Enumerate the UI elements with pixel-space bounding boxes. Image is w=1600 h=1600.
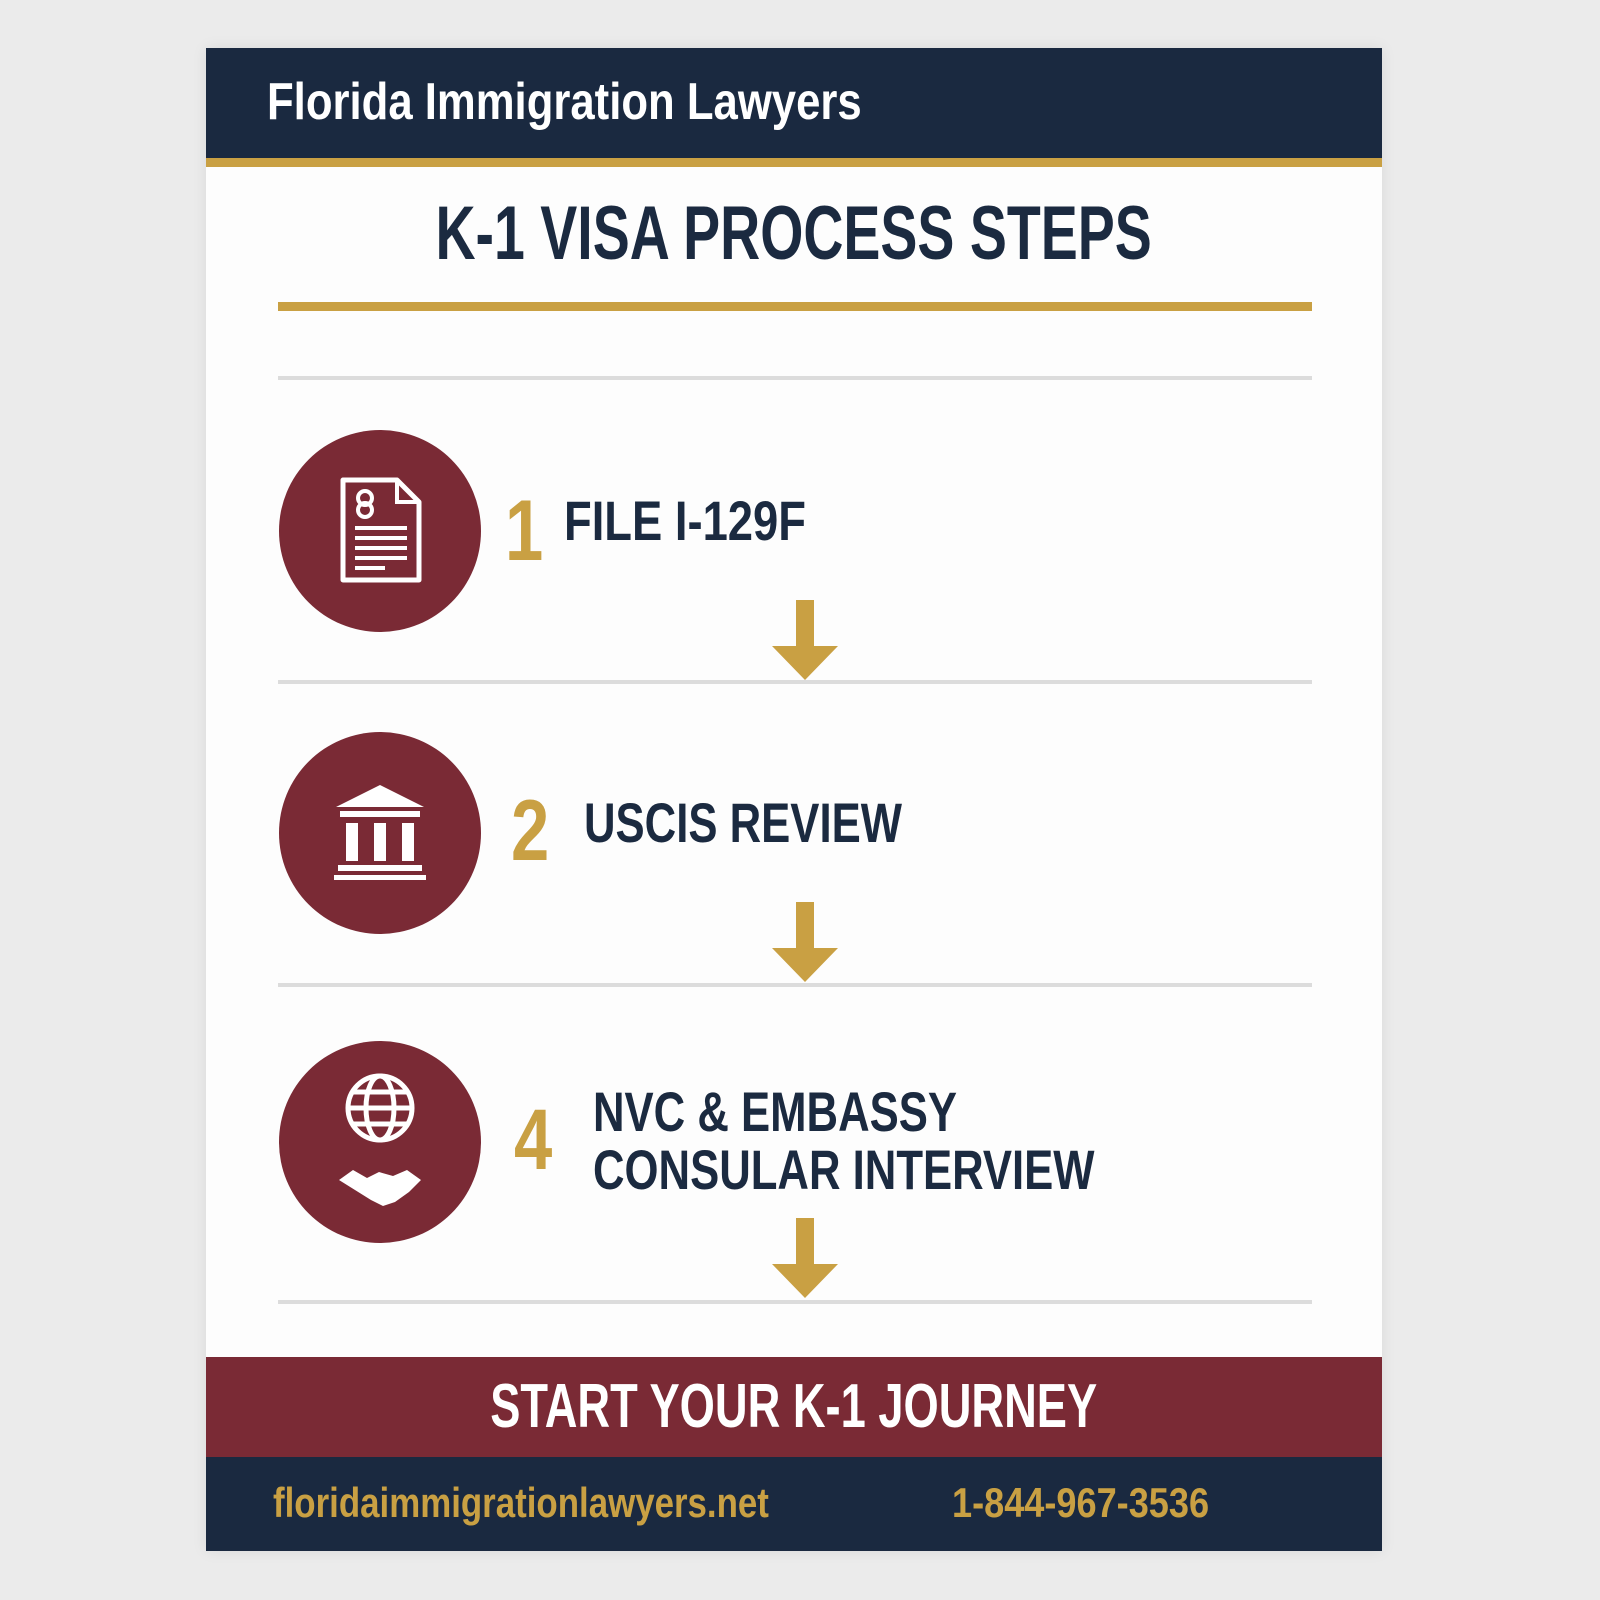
step number 1: 1 bbox=[505, 483, 543, 579]
step number 2: 2 bbox=[511, 783, 549, 879]
arrow 2 bbox=[772, 902, 838, 982]
website: floridaimmigrationlawyers.net bbox=[273, 1479, 769, 1526]
icon: document bbox=[279, 430, 481, 632]
icon: globe and handshake bbox=[279, 1041, 481, 1243]
step number 4: 4 bbox=[514, 1092, 552, 1188]
step label 2: USCIS REVIEW bbox=[584, 791, 902, 854]
title: K-1 VISA PROCESS STEPS bbox=[436, 191, 1152, 276]
step label 1: FILE I-129F bbox=[564, 489, 806, 552]
icon: government building bbox=[279, 732, 481, 934]
footer contact bar bbox=[206, 1457, 1382, 1551]
phone: 1-844-967-3536 bbox=[952, 1479, 1209, 1526]
step label 4 bbox=[593, 1080, 1095, 1201]
step 2 bbox=[279, 732, 902, 934]
step label 4: CONSULAR INTERVIEW bbox=[593, 1138, 1095, 1201]
header brand text: Florida Immigration Lawyers bbox=[267, 73, 862, 131]
call to action banner bbox=[206, 1357, 1382, 1457]
step 1 bbox=[279, 430, 806, 632]
header bar bbox=[206, 48, 1382, 158]
arrow 3 bbox=[772, 1218, 838, 1298]
card panel bbox=[206, 48, 1382, 1551]
arrow 1 bbox=[772, 600, 838, 680]
step 4 bbox=[279, 1041, 1095, 1243]
step label 4: NVC & EMBASSY bbox=[593, 1080, 957, 1143]
call to action banner: START YOUR K-1 JOURNEY bbox=[491, 1372, 1097, 1441]
